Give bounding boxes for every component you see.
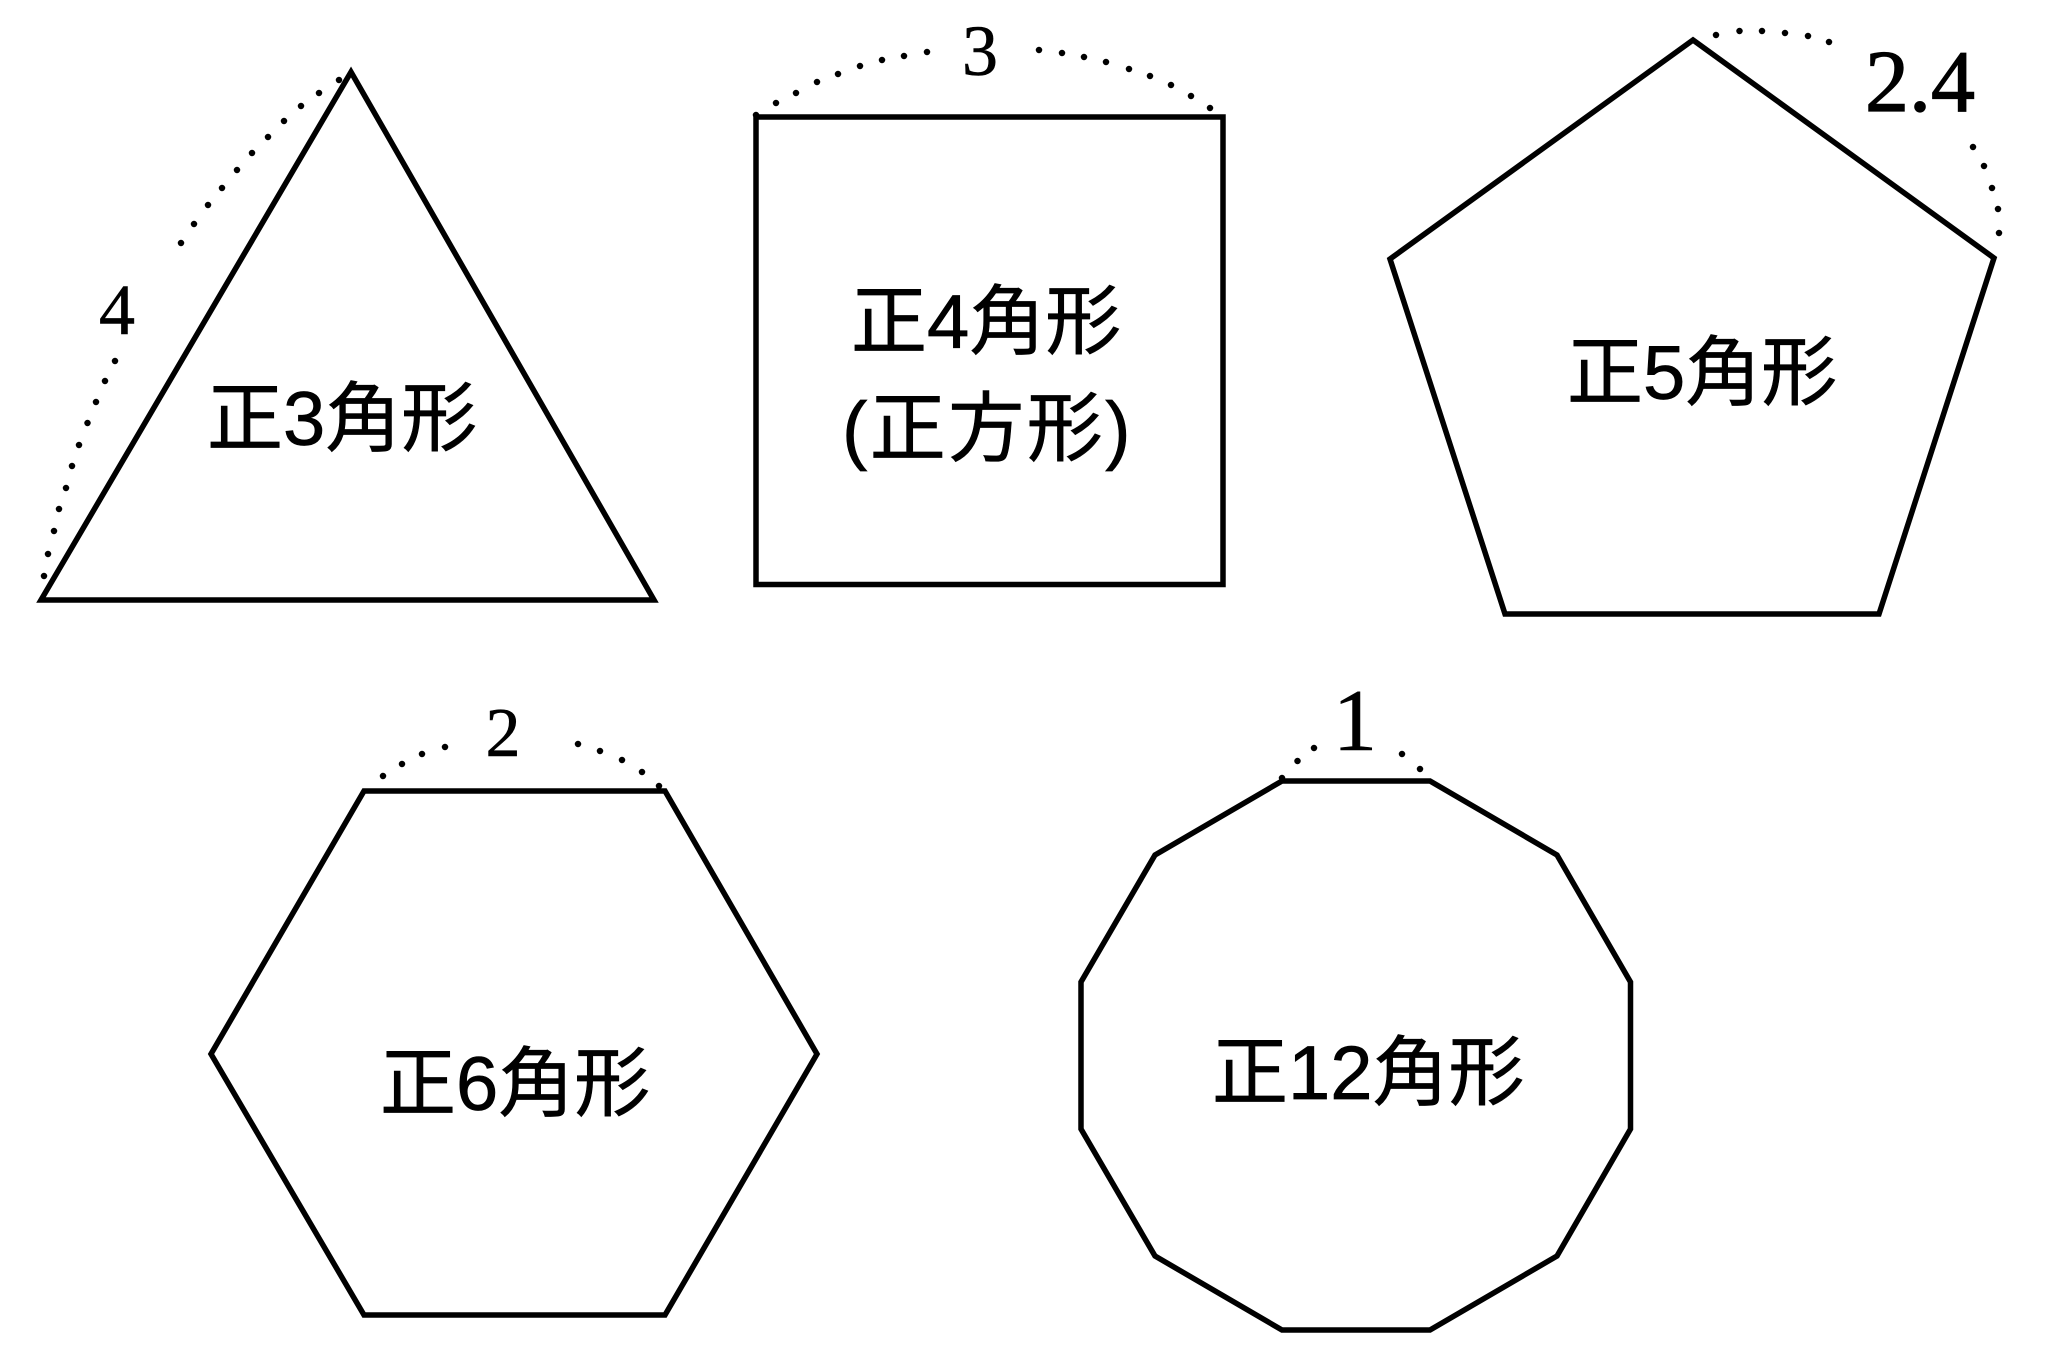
dotted side-length arc: [1282, 748, 1420, 778]
panel: regular hexagon: [211, 695, 817, 1315]
side length label 2.4: 2.4: [1865, 34, 1975, 131]
pentagon outline: [1390, 40, 1994, 614]
triangle outline: [41, 72, 654, 600]
dotted side-length arc: [756, 50, 1210, 115]
panel: regular dodecagon: [1081, 673, 1630, 1330]
shape name: 正4角形: [851, 280, 1121, 365]
panel: regular pentagon: [1390, 31, 1999, 614]
square outline: [756, 117, 1223, 584]
dodecagon outline: [1081, 781, 1630, 1330]
side length label 3: 3: [962, 11, 998, 91]
side length label 4: 4: [99, 270, 135, 350]
panel: regular triangle: [41, 72, 654, 600]
shape name: 正3角形: [207, 377, 477, 462]
dotted side-length arc: [383, 744, 659, 786]
shape name: 正6角形: [380, 1042, 650, 1127]
side length label 2: 2: [486, 695, 520, 772]
alternate shape name: (正方形): [842, 387, 1133, 472]
dotted side-length arc: [1716, 31, 1999, 233]
panel: square: [756, 11, 1223, 584]
shape name: 正12角形: [1212, 1031, 1525, 1116]
shape name: 正5角形: [1567, 331, 1837, 416]
hexagon outline: [211, 791, 817, 1315]
dotted side-length arc: [44, 80, 339, 576]
side length label 1: 1: [1333, 673, 1377, 770]
